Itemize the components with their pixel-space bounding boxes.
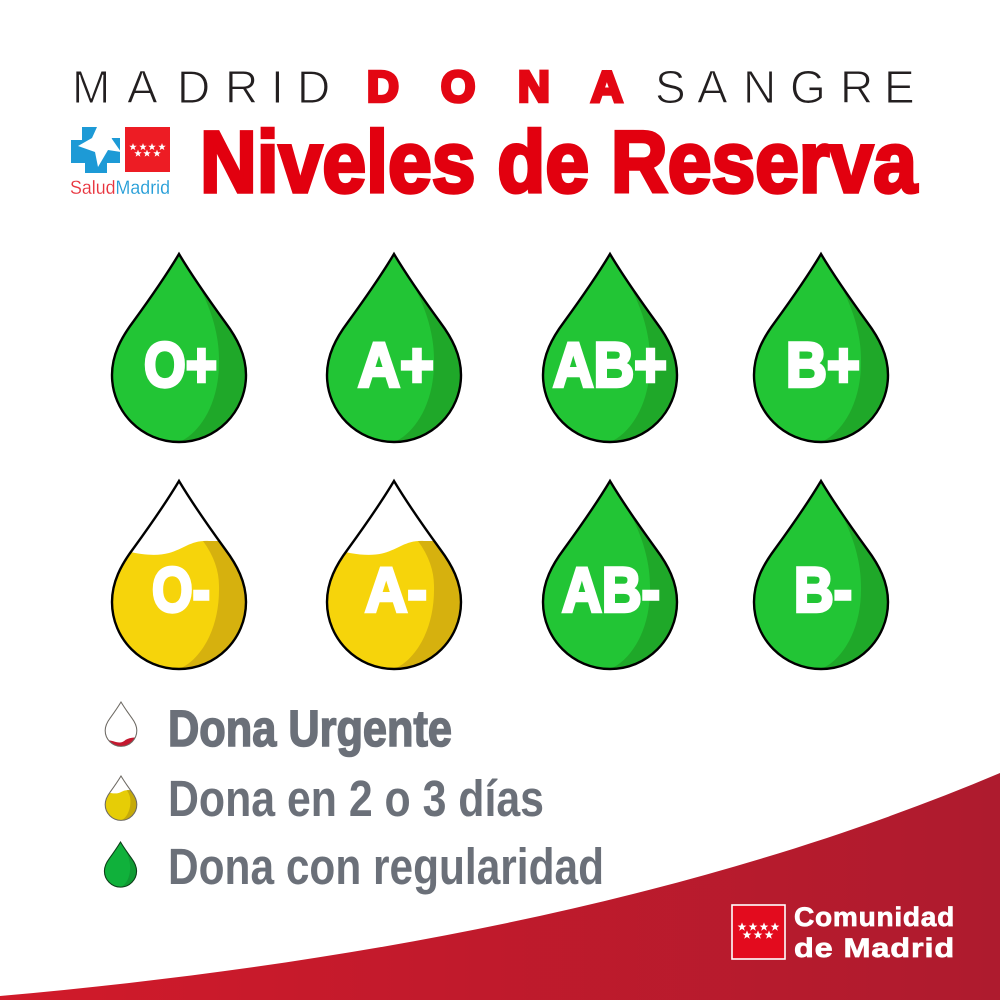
logo text line 2: de Madrid: [794, 933, 955, 963]
icon: yellow level drop: [104, 775, 138, 821]
legend text: 2 or 3 days: Dona en 2 o 3 días: [168, 770, 544, 827]
icon: blue cross with white star: [71, 127, 121, 173]
drop: AB+: [543, 254, 677, 442]
icon: red flag with stars: [125, 127, 170, 172]
drop: AB-: [543, 481, 677, 669]
heading word: DONA: DONA: [367, 62, 623, 112]
drop: O-: O-: [152, 556, 210, 626]
drop: B-: [754, 481, 888, 669]
drop: O+: O+: [144, 330, 217, 400]
logo: Comunidad de Madrid: [732, 902, 955, 963]
legend: [102, 700, 604, 895]
drop: A-: A-: [365, 556, 427, 626]
drop: O+: [112, 254, 246, 442]
drop: AB+: AB+: [553, 330, 667, 400]
logo: SaludMadrid: [70, 127, 170, 199]
drop: A+: [327, 254, 461, 442]
logo wordmark: SaludMadrid: [70, 178, 170, 199]
drop: A-: [314, 481, 474, 681]
logo text line 1: Comunidad: [794, 902, 955, 932]
drop: A+: A+: [358, 330, 434, 400]
drop: B+: [754, 254, 888, 442]
legend text: urgent: Dona Urgente: [168, 700, 452, 757]
campaign heading: [72, 61, 915, 113]
heading word: SANGRE: SANGRE: [655, 61, 915, 113]
legend text: regularly: Dona con regularidad: [168, 838, 604, 895]
title: Niveles de Reserva: [200, 114, 918, 211]
icon: green drop: [104, 842, 137, 887]
icon: red level drop: [104, 701, 138, 747]
drop: B+: B+: [786, 330, 860, 400]
heading word: MADRID: MADRID: [72, 61, 330, 113]
drop: O-: [99, 481, 259, 681]
red curved footer band: [0, 773, 1000, 1000]
drop: AB-: AB-: [562, 556, 660, 626]
icon: flag with stars: [732, 905, 785, 959]
drop: B-: B-: [794, 556, 852, 626]
